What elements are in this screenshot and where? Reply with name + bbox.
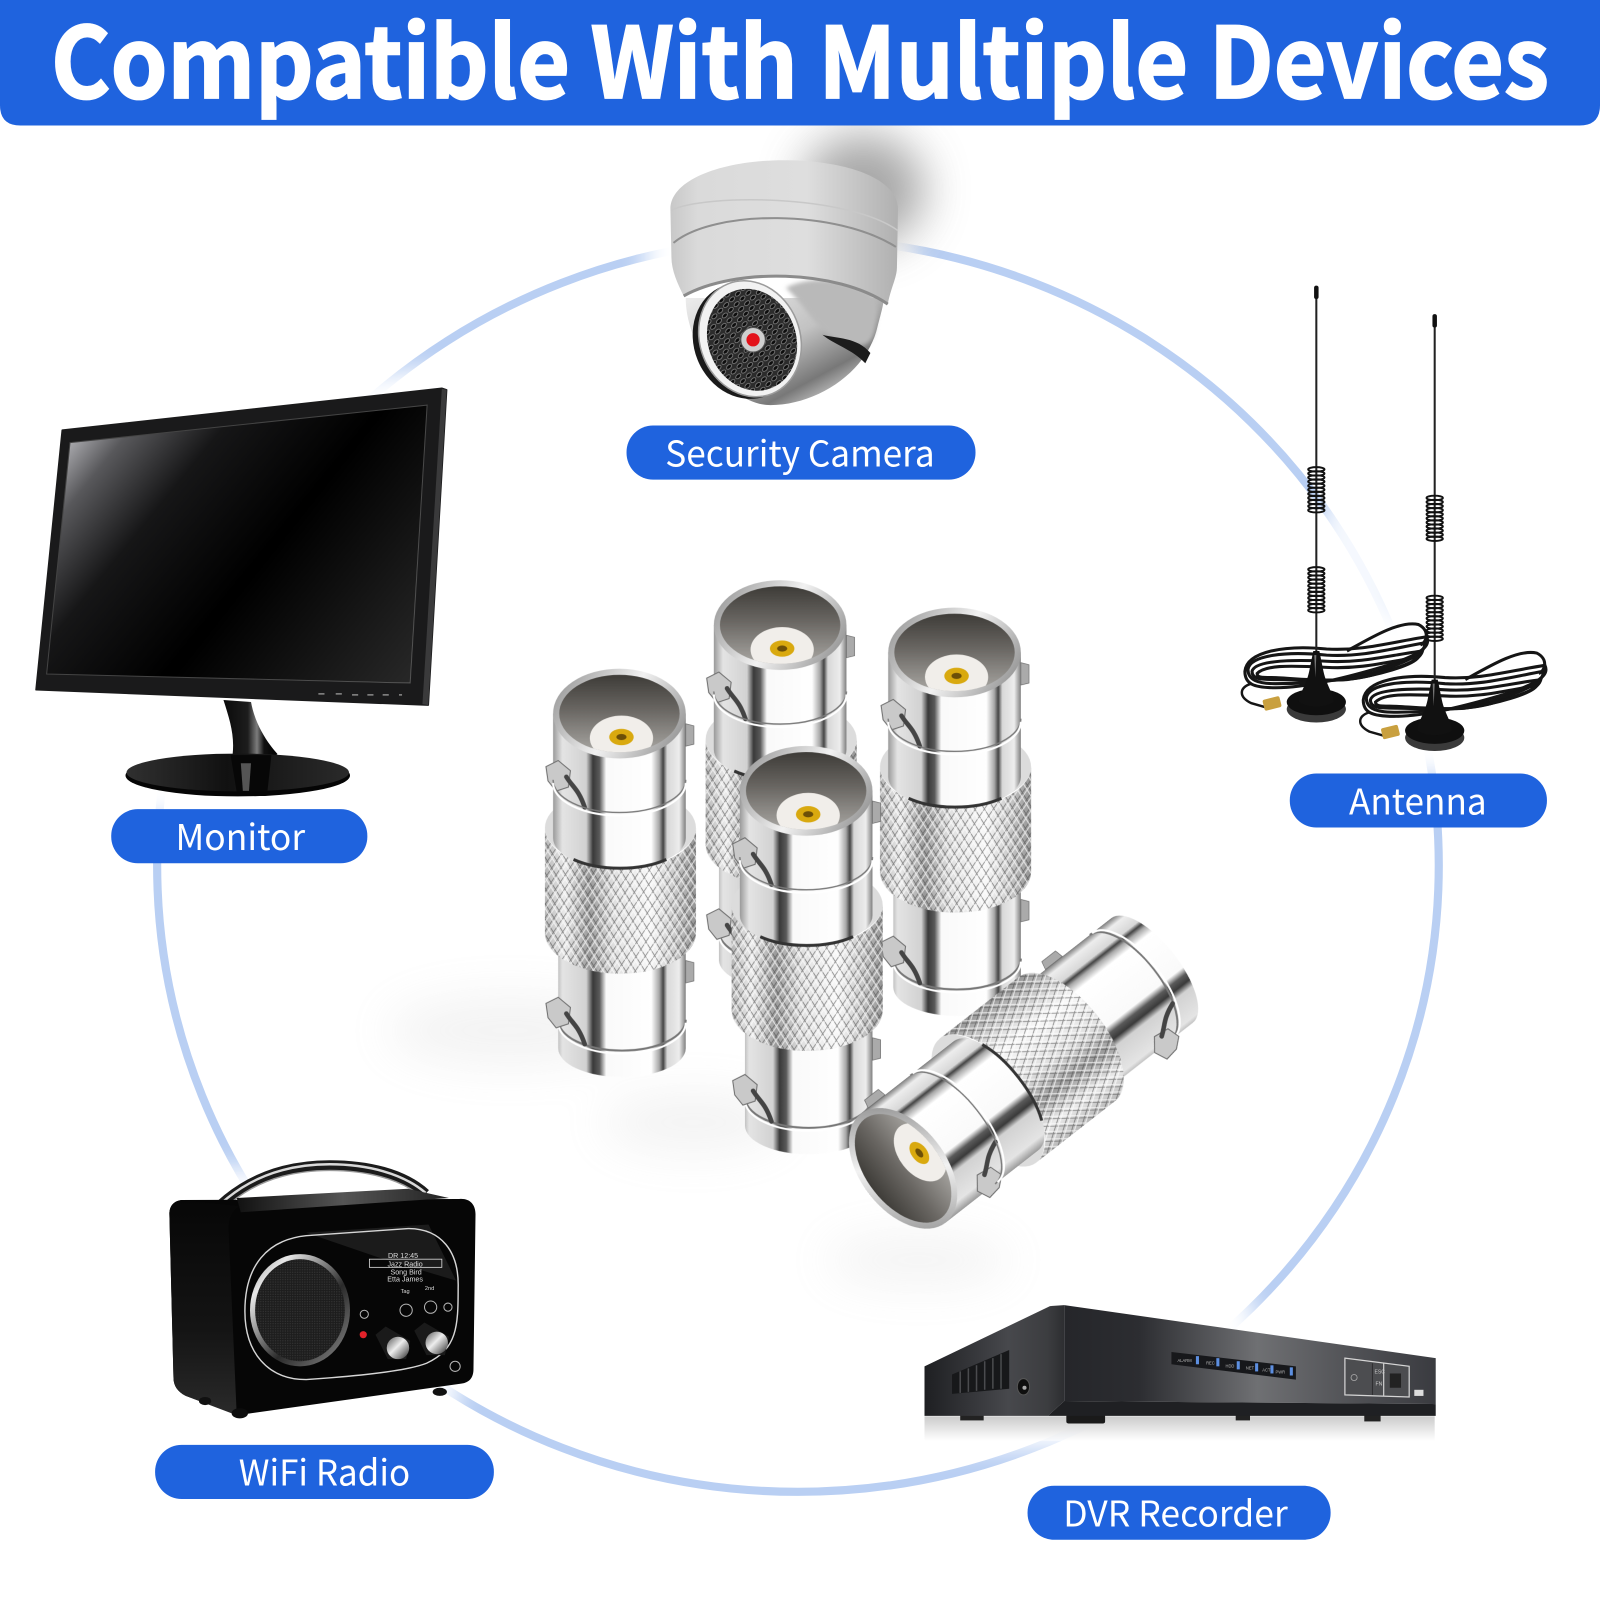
lens [675, 267, 814, 415]
device: dvr recorder: PWR [1276, 1369, 1285, 1374]
device: dvr recorder: FN [1376, 1382, 1383, 1388]
connector: centre [732, 746, 883, 1154]
soft reflections below connectors [388, 995, 1010, 1286]
chrome swoop [786, 280, 877, 346]
stand base [126, 755, 350, 796]
red led [360, 1331, 367, 1338]
device: dvr recorder: HDD [1226, 1363, 1234, 1368]
lip [1048, 1401, 1436, 1416]
device: monitor [36, 388, 447, 796]
display: Etta James [387, 1276, 423, 1284]
vents [952, 1350, 1009, 1394]
device: dvr recorder: ACT [1262, 1367, 1271, 1372]
control panel [1345, 1358, 1409, 1397]
device: dvr recorder [924, 1305, 1436, 1441]
buttons [360, 1301, 460, 1371]
header banner [0, 0, 1600, 127]
connector: left [545, 669, 696, 1077]
side [169, 1200, 240, 1415]
device: antenna pair [1242, 286, 1546, 751]
usb [1414, 1390, 1423, 1396]
connector: back right [880, 608, 1031, 1016]
connector: back [706, 580, 857, 989]
display: Jazz Radio [387, 1260, 423, 1268]
label: antenna [1290, 773, 1547, 828]
floor reflection [924, 1416, 1435, 1441]
screen [47, 405, 427, 683]
antenna left [1242, 286, 1428, 722]
label: antenna: Antenna [1349, 774, 1487, 825]
antenna right [1360, 314, 1546, 751]
label: monitor [111, 809, 367, 863]
device: dvr recorder: ESC [1374, 1369, 1385, 1375]
display: Song Bird [390, 1268, 422, 1276]
speaker [250, 1254, 350, 1366]
label: dvr recorder: DVR Recorder [1063, 1487, 1288, 1538]
device: wifi radio [169, 1164, 476, 1418]
oval trim [245, 1229, 458, 1380]
label: security camera: Security Camera [665, 426, 935, 477]
lock [1017, 1379, 1030, 1395]
display: 2nd [425, 1286, 434, 1292]
handle [220, 1165, 426, 1205]
display: DR 12:45 [388, 1252, 418, 1260]
feet [199, 1397, 211, 1405]
led strip [1171, 1352, 1296, 1380]
top plane [237, 1189, 449, 1212]
body silhouette [169, 1199, 476, 1415]
front [1064, 1305, 1436, 1404]
side [924, 1305, 1064, 1416]
bezel [36, 388, 447, 705]
device: dvr recorder: ALARM [1178, 1358, 1192, 1363]
ceiling shadow [802, 134, 924, 246]
device: dvr recorder: NET [1246, 1365, 1255, 1370]
connector: lying [820, 893, 1223, 1256]
knobs [376, 1327, 410, 1359]
chrome dome [686, 298, 884, 405]
connecting ring [157, 239, 1439, 1492]
label: wifi radio [155, 1445, 494, 1499]
display [369, 1252, 442, 1295]
housing [670, 160, 898, 304]
device: dvr recorder: REC [1206, 1360, 1215, 1365]
gloss [306, 1224, 456, 1281]
label: wifi radio: WiFi Radio [239, 1446, 410, 1497]
soft white fades around devices [31, 143, 1561, 1449]
label: monitor: Monitor [176, 810, 305, 861]
control marks [318, 694, 402, 695]
stand neck [223, 700, 278, 761]
display: Tag [401, 1289, 410, 1295]
feet [960, 1414, 984, 1420]
device: security camera [670, 134, 924, 415]
